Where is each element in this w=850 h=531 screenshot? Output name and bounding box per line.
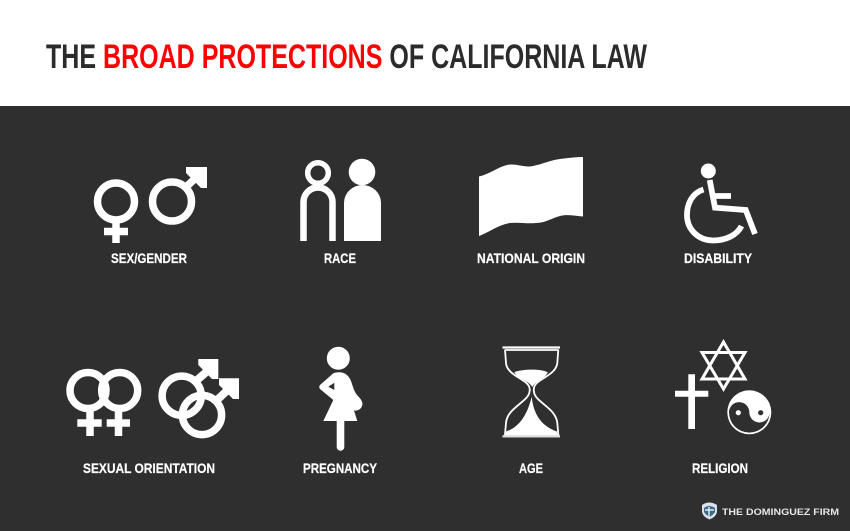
item: disability (684, 164, 755, 266)
icon: two people (304, 159, 381, 241)
icon: female and male symbols (98, 167, 207, 243)
icon: wheelchair (687, 164, 755, 240)
item: race (304, 159, 381, 266)
label: sex/gender: SEX/GENDER (111, 250, 187, 266)
label: pregnancy: PREGNANCY (303, 460, 378, 476)
icon: two female symbols (70, 372, 138, 436)
item: national origin (477, 157, 585, 266)
item: sexual orientation (70, 359, 239, 476)
label: race: RACE (324, 250, 356, 266)
icon: hourglass (502, 348, 560, 436)
logo (702, 502, 839, 520)
item: religion (675, 342, 771, 476)
icon: shield (702, 502, 717, 520)
label: national origin: NATIONAL ORIGIN (477, 250, 585, 266)
item: pregnancy (303, 347, 378, 476)
icon: two male symbols (162, 359, 239, 435)
icon: cross (675, 374, 708, 429)
item: sex/gender (98, 167, 207, 266)
label: religion: RELIGION (692, 460, 748, 476)
icon: star of david (702, 342, 745, 389)
label: sexual orientation: SEXUAL ORIENTATION (83, 460, 215, 476)
label: age: AGE (519, 460, 543, 476)
icon: yin yang (727, 390, 771, 434)
icon: pregnant figure (319, 347, 362, 451)
label: disability: DISABILITY (684, 250, 753, 266)
title: THE BROAD PROTECTIONS OF CALIFORNIA LAW (46, 38, 648, 76)
logo wordmark: THE DOMINGUEZ FIRM (722, 507, 839, 517)
item: age (502, 348, 560, 476)
icon: waving flag (479, 157, 583, 236)
